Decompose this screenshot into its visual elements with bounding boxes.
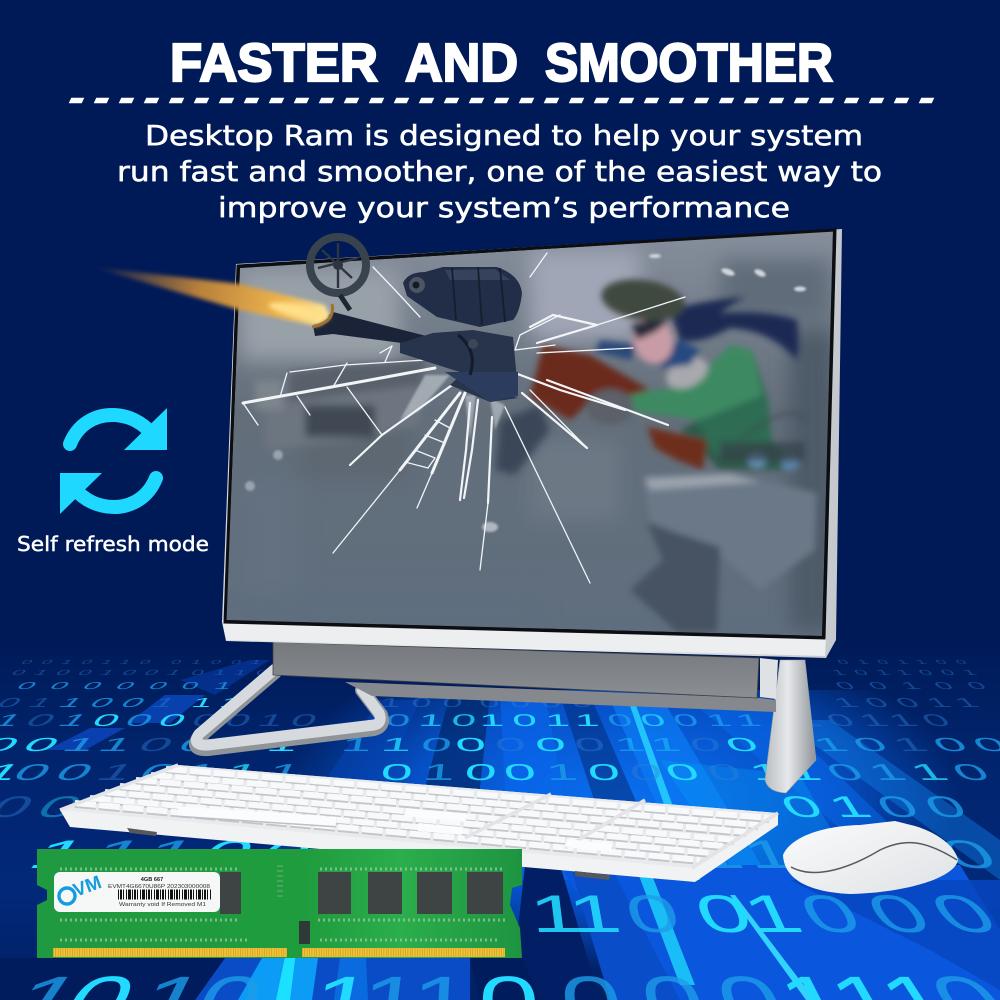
- binary digit rows: 0100: [502, 760, 674, 785]
- hair: [670, 297, 798, 360]
- sniper rifle bursting through screen: [92, 237, 522, 402]
- icon: self refresh arrows: [60, 408, 167, 514]
- binary digit rows: 000: [454, 734, 576, 755]
- binary digit rows: 110: [339, 734, 463, 755]
- binary digit rows: 01: [179, 680, 251, 691]
- binary digit rows: 000: [87, 711, 199, 730]
- left stand leg: [196, 669, 382, 749]
- solder pads: [60, 865, 505, 940]
- description text: run fast and smoother, one of the easiest way to: [117, 155, 882, 188]
- rifle sight ring: [310, 237, 366, 310]
- rifle stock: [530, 345, 650, 420]
- key block gaps: [60, 765, 778, 868]
- title: FASTER: [170, 33, 378, 93]
- description text: [117, 119, 882, 224]
- RAM module: [37, 849, 522, 958]
- binary digit rows: 0101100: [834, 658, 979, 665]
- binary digit rows: 01: [721, 734, 812, 755]
- warranty label: 4GB 667: [141, 877, 163, 883]
- keyboard feet: [127, 828, 610, 880]
- keys: [75, 769, 769, 860]
- binary digit rows: 111: [177, 760, 316, 785]
- digital binary floor: [0, 640, 1000, 1000]
- binary digit rows: 1: [564, 884, 626, 944]
- rifle scope: [403, 267, 522, 327]
- binary digit rows: 100: [380, 695, 474, 710]
- all-in-one computer: [196, 229, 842, 793]
- binary digit rows: 0010: [188, 711, 330, 730]
- binary digit rows: 0110: [189, 668, 281, 677]
- binary digit rows: 010: [379, 760, 508, 785]
- binary digit rows: 0110: [572, 734, 733, 755]
- binary digit rows: 01: [223, 734, 313, 755]
- speaker bar: [273, 642, 759, 698]
- binary digit rows: 0100: [773, 790, 986, 824]
- snow specks: [245, 254, 806, 532]
- rifle barrel and receiver: [313, 312, 518, 402]
- warranty label: Warranty void If Removed M1: [119, 902, 206, 908]
- binary digit rows: [0, 658, 1000, 1000]
- self refresh label: Self refresh mode: [17, 532, 209, 556]
- shattered glass cracks: [243, 253, 685, 583]
- binary digit rows: 1011001: [828, 668, 990, 677]
- binary digit rows: 1: [526, 884, 585, 944]
- gold contact pins: [53, 948, 505, 957]
- binary digit rows: 01001: [169, 659, 273, 665]
- binary digit rows: 10011: [829, 696, 995, 710]
- binary digit rows: 11: [683, 832, 814, 877]
- description text: improve your system’s performance: [218, 191, 790, 224]
- hinge bar: [345, 682, 776, 712]
- scarf: [650, 340, 700, 368]
- keyboard: [60, 765, 778, 882]
- binary digit rows: 0: [686, 885, 761, 944]
- space bar and wide keys: [178, 811, 612, 848]
- warranty label: EVMT4G6670U86P 202303000008: [108, 884, 210, 890]
- muzzle flash tracer: [92, 267, 333, 327]
- binary digit rows: 0011: [661, 760, 836, 785]
- girl: pouches: [747, 453, 767, 467]
- binary digit rows: 11: [188, 695, 256, 710]
- binary digit rows: 0: [787, 884, 873, 943]
- warranty label: [54, 872, 220, 912]
- description text: Desktop Ram is designed to help your system: [145, 119, 863, 152]
- mouse: [783, 821, 958, 894]
- binary digit rows: 0010110: [18, 659, 164, 666]
- title: SMOOTHER: [545, 33, 833, 93]
- binary digit rows: 0: [618, 885, 687, 944]
- binary digit rows: 1: [733, 885, 812, 944]
- girl: thigh and boot: [647, 481, 819, 586]
- girl: green jacket: [680, 420, 785, 474]
- title: AND: [405, 33, 518, 93]
- binary digit rows: 01001001: [8, 668, 194, 677]
- EVM logo: [59, 872, 104, 904]
- impact white shards: [400, 375, 505, 440]
- binary digit rows: 111001: [18, 832, 395, 877]
- binary digit rows: 1011: [478, 711, 609, 730]
- keys shadow: [75, 770, 769, 861]
- dashed divider: [70, 98, 934, 103]
- right stand leg: [765, 660, 816, 793]
- fur hat: [599, 274, 687, 326]
- binary digit rows: 10110: [787, 711, 964, 730]
- binary digit rows: 0000: [478, 695, 604, 710]
- binary digit rows: 0: [853, 884, 944, 943]
- fur collar: [661, 351, 713, 395]
- binary digit rows: 1100: [57, 734, 229, 755]
- bezel: [222, 229, 842, 658]
- binary digit rows: 00011: [604, 711, 773, 730]
- EVM logo: VM: [71, 872, 104, 902]
- memory chips: [220, 872, 503, 944]
- binary digit rows: 010: [384, 711, 486, 730]
- binary digit rows: 00000: [12, 681, 189, 692]
- binary digit rows: 0010: [6, 759, 196, 785]
- face: [627, 312, 679, 368]
- screen: game artwork: [226, 231, 835, 636]
